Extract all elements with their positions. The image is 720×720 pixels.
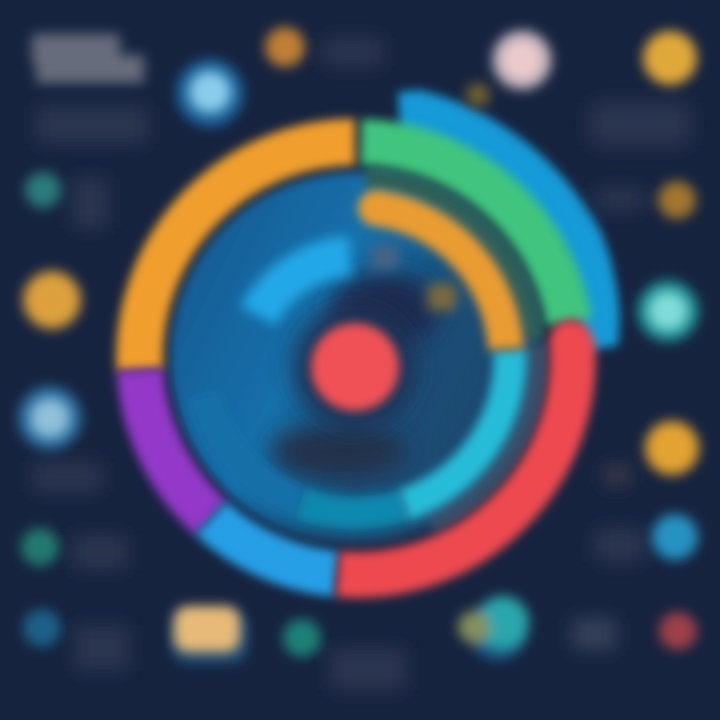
icon: orange circle right lower bbox=[645, 421, 699, 475]
small centre labels bbox=[372, 245, 456, 310]
segment: purple bbox=[140, 370, 211, 518]
icon: teal circle bottom bbox=[283, 619, 321, 657]
icon: blue circle right bbox=[652, 514, 698, 560]
center red circle bbox=[311, 323, 399, 411]
icon: orange circle right bbox=[658, 181, 696, 219]
inner segment: orange bbox=[358, 190, 506, 349]
left text block lines bbox=[32, 106, 148, 671]
inner segment: teal bbox=[300, 503, 404, 513]
segment: lower blue bbox=[211, 518, 336, 574]
icon: yellow circle top right bbox=[643, 31, 697, 85]
inner bright blue arc bbox=[258, 256, 350, 316]
icon: light blue circle bbox=[176, 59, 244, 127]
icon: teal and orange badge bbox=[458, 596, 529, 660]
icon: teal circle left bbox=[25, 172, 61, 208]
icon: pink circle bbox=[492, 30, 552, 90]
icon: orange circle top bbox=[265, 27, 305, 67]
gap band upper right bbox=[366, 178, 534, 340]
donut chart bbox=[140, 90, 620, 575]
right text block lines bbox=[322, 38, 690, 690]
icon: yellow card bbox=[172, 606, 248, 664]
icon: teal circle right bbox=[637, 280, 699, 342]
inner disc bbox=[170, 172, 542, 544]
top-left title block bbox=[32, 34, 144, 83]
inner segment: cyan bbox=[404, 350, 510, 505]
icon: small gold marker bbox=[466, 83, 490, 107]
brownish marker right bbox=[604, 465, 630, 485]
icon: orange circle left bbox=[23, 271, 81, 329]
segment: red bbox=[338, 320, 593, 575]
icon: red circle bottom right bbox=[659, 612, 697, 650]
icon: teal circle lower left bbox=[21, 528, 59, 566]
gap band lower right bbox=[430, 345, 536, 523]
icon: pale blue circle left bbox=[18, 386, 82, 450]
segment: orange bbox=[140, 142, 355, 370]
icon: blue circle bottom left bbox=[23, 609, 61, 647]
inner segment: lower left blue bbox=[205, 395, 300, 503]
outer blue arc with arrow bbox=[398, 90, 620, 350]
segment: green bbox=[361, 142, 569, 322]
